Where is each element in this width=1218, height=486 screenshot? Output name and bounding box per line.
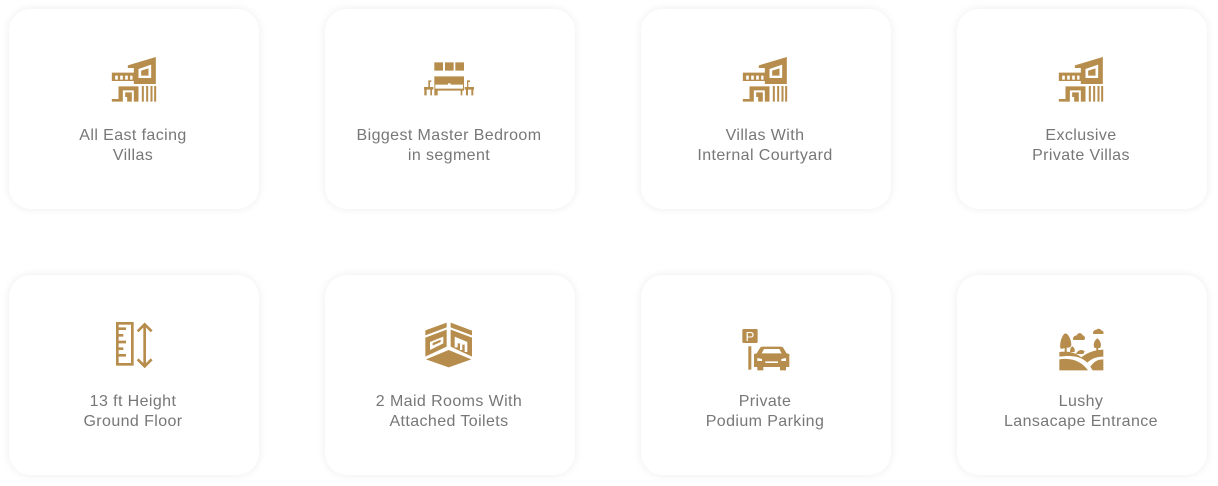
icon: ruler and height arrow bbox=[117, 323, 152, 366]
icon: villa 1 bbox=[112, 57, 156, 102]
card: Lushy Lansacape Entrance: Lushy bbox=[1059, 393, 1103, 410]
card: 13 ft Height Ground Floor: 13 ft Height bbox=[90, 393, 176, 410]
card: Biggest Master Bedroom: Biggest Master Bedroom bbox=[357, 127, 541, 144]
card: Villas With Internal Courtyard bbox=[641, 9, 891, 209]
card: 2 Maid Rooms With Attached Toilets bbox=[325, 275, 575, 475]
card: Exclusive Private Villas: Exclusive bbox=[1045, 127, 1117, 144]
icon: maid rooms bbox=[425, 323, 472, 367]
card: Lushy Lansacape Entrance bbox=[957, 275, 1207, 475]
card: Exclusive Private Villas bbox=[957, 9, 1207, 209]
card: 2 Maid Rooms With Attached Toilets: Attached Toilets bbox=[389, 413, 509, 430]
card: 13 ft Height Ground Floor bbox=[9, 275, 259, 475]
card: Private Podium Parking bbox=[641, 275, 891, 475]
card: 2 Maid Rooms With Attached Toilets: 2 Maid Rooms With bbox=[376, 393, 522, 410]
icon: bedroom bbox=[424, 62, 474, 95]
card: Lushy Lansacape Entrance: Lansacape Entrance bbox=[1004, 413, 1158, 430]
icon: landscape bbox=[1059, 329, 1104, 370]
card: Exclusive Private Villas: Private Villas bbox=[1032, 147, 1130, 164]
icon: villa 3 bbox=[1059, 57, 1103, 102]
card: All East facing Villas: All East facing bbox=[79, 127, 187, 144]
card: Private Podium Parking: Private bbox=[739, 393, 791, 410]
icon: parking bbox=[742, 329, 789, 370]
icon: villa 2 bbox=[743, 57, 787, 102]
icon: parking: P bbox=[746, 329, 755, 344]
card: All East facing Villas: Villas bbox=[113, 147, 153, 164]
card: Villas With Internal Courtyard: Villas With bbox=[726, 127, 804, 144]
card: Biggest Master Bedroom: in segment bbox=[408, 147, 490, 164]
card: 13 ft Height Ground Floor: Ground Floor bbox=[83, 413, 183, 430]
card: Private Podium Parking: Podium Parking bbox=[706, 413, 824, 430]
card: All East facing Villas bbox=[9, 9, 259, 209]
card: Biggest Master Bedroom bbox=[325, 9, 575, 209]
card: Villas With Internal Courtyard: Internal Courtyard bbox=[697, 147, 833, 164]
